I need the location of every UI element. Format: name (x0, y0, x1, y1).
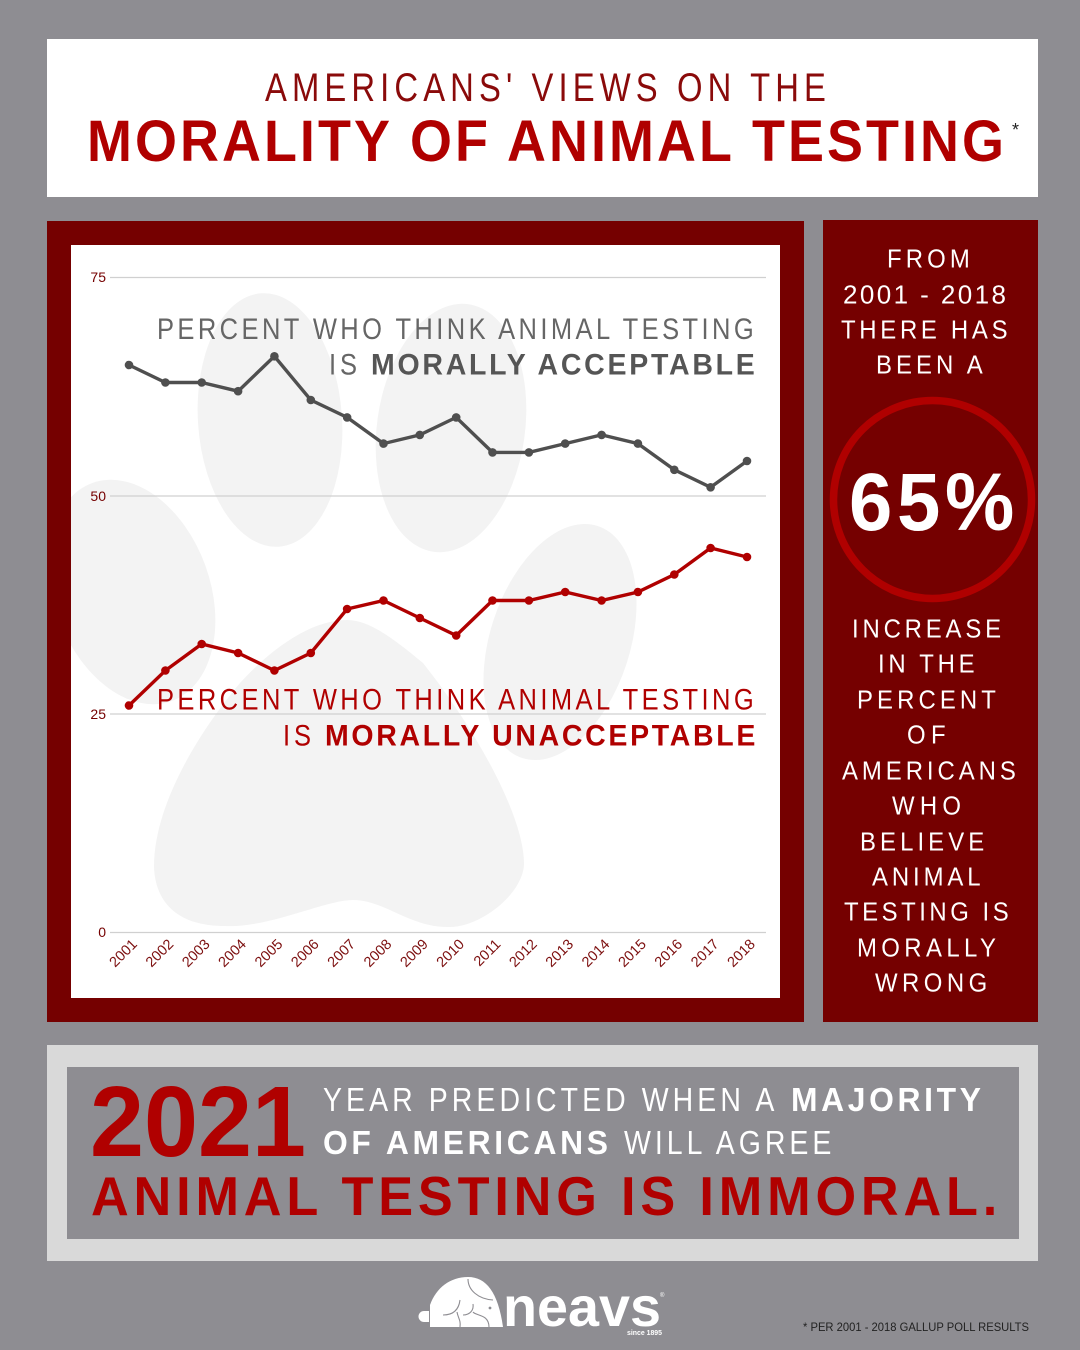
line series: morally unacceptable (125, 544, 751, 710)
logo: neavs (418, 1275, 665, 1338)
text: explanation: TESTING IS (844, 898, 1009, 927)
y axis labels: 75 (90, 269, 106, 285)
x axis labels: 2014 (579, 937, 613, 971)
y axis labels (90, 269, 106, 940)
text: explanation: BELIEVE (860, 828, 984, 857)
text: lead-in: BEEN A (876, 351, 983, 380)
x axis labels: 2012 (506, 937, 541, 971)
big year: 2021 (90, 1066, 306, 1178)
icon: elephant (418, 1277, 503, 1327)
conclusion: ANIMAL TESTING IS IMMORAL. (91, 1166, 997, 1227)
y axis labels: 0 (98, 924, 106, 940)
prediction text: OF AMERICANS (323, 1123, 608, 1161)
prediction text: MAJORITY (791, 1080, 981, 1118)
stat circle (834, 400, 1032, 598)
line series: morally acceptable (125, 352, 751, 492)
x axis labels: 2004 (216, 937, 250, 971)
prediction text (323, 1080, 981, 1162)
prediction text: WILL AGREE (624, 1124, 831, 1162)
x axis labels: 2002 (143, 937, 177, 971)
x axis labels: 2018 (725, 937, 759, 971)
registered mark: ® (660, 1292, 665, 1299)
text: lead-in: THERE HAS (841, 316, 1008, 345)
grid lines (110, 278, 766, 932)
series label: morally unacceptable: MORALLY UNACCEPTABLE (325, 720, 755, 753)
panel: line chart (19, 221, 804, 1022)
x axis labels: 2010 (434, 937, 468, 971)
x axis labels: 2009 (397, 937, 432, 971)
series label: morally unacceptable: PERCENT WHO THINK ANIMAL TESTING (157, 683, 754, 716)
series label: morally acceptable: PERCENT WHO THINK ANIMAL TESTING (157, 312, 754, 345)
footnote: * PER 2001 - 2018 GALLUP POLL RESULTS (803, 1320, 1029, 1334)
stat circle: 65% (849, 456, 1014, 547)
x axis labels: 2003 (179, 937, 214, 971)
text: lead-in: 2001 - 2018 (843, 280, 1006, 310)
series label: morally unacceptable (157, 683, 755, 753)
text: lead-in: FROM (887, 245, 970, 274)
text: explanation: AMERICANS (842, 757, 1016, 786)
x axis labels: 2006 (288, 937, 323, 971)
x axis labels: 2015 (616, 937, 650, 971)
prediction text: YEAR PREDICTED WHEN A (323, 1081, 775, 1119)
text: explanation: ANIMAL (872, 863, 981, 892)
panel: 2021 prediction (47, 1045, 1038, 1261)
title line one: AMERICANS' VIEWS ON THE (265, 65, 826, 110)
text: explanation: INCREASE (852, 615, 1001, 644)
series label: morally unacceptable: IS (283, 719, 311, 752)
x axis labels: 2011 (471, 937, 504, 970)
title line two: MORALITY OF ANIMAL TESTING (87, 108, 1004, 173)
text: explanation (842, 615, 1016, 998)
x axis labels: 2013 (543, 937, 577, 971)
text: explanation: WRONG (875, 969, 987, 998)
tagline: since 1895 (627, 1330, 662, 1337)
title asterisk: * (1012, 120, 1019, 140)
x axis labels: 2005 (252, 937, 286, 971)
x axis labels: 2016 (652, 937, 686, 971)
series label: morally acceptable: MORALLY ACCEPTABLE (371, 349, 755, 382)
text: explanation: IN THE (878, 650, 975, 679)
series label: morally acceptable (157, 312, 755, 382)
text: explanation: OF (907, 721, 946, 750)
x axis labels (107, 937, 759, 971)
x axis labels: 2008 (361, 937, 395, 971)
x axis labels: 2007 (325, 937, 359, 971)
text: explanation: WHO (892, 792, 961, 821)
series label: morally acceptable: IS (329, 348, 357, 381)
text: lead-in (841, 245, 1008, 380)
icon: paw print watermark (19, 288, 664, 927)
wordmark: neavs (503, 1275, 661, 1338)
text: explanation: MORALLY (857, 934, 996, 963)
title panel (47, 39, 1038, 197)
x axis labels: 2017 (688, 937, 722, 971)
panel: 65 percent statistic (823, 220, 1038, 1022)
y axis labels: 25 (90, 706, 106, 722)
text: explanation: PERCENT (857, 686, 996, 715)
x axis labels: 2001 (107, 937, 141, 971)
y axis labels: 50 (90, 488, 106, 504)
